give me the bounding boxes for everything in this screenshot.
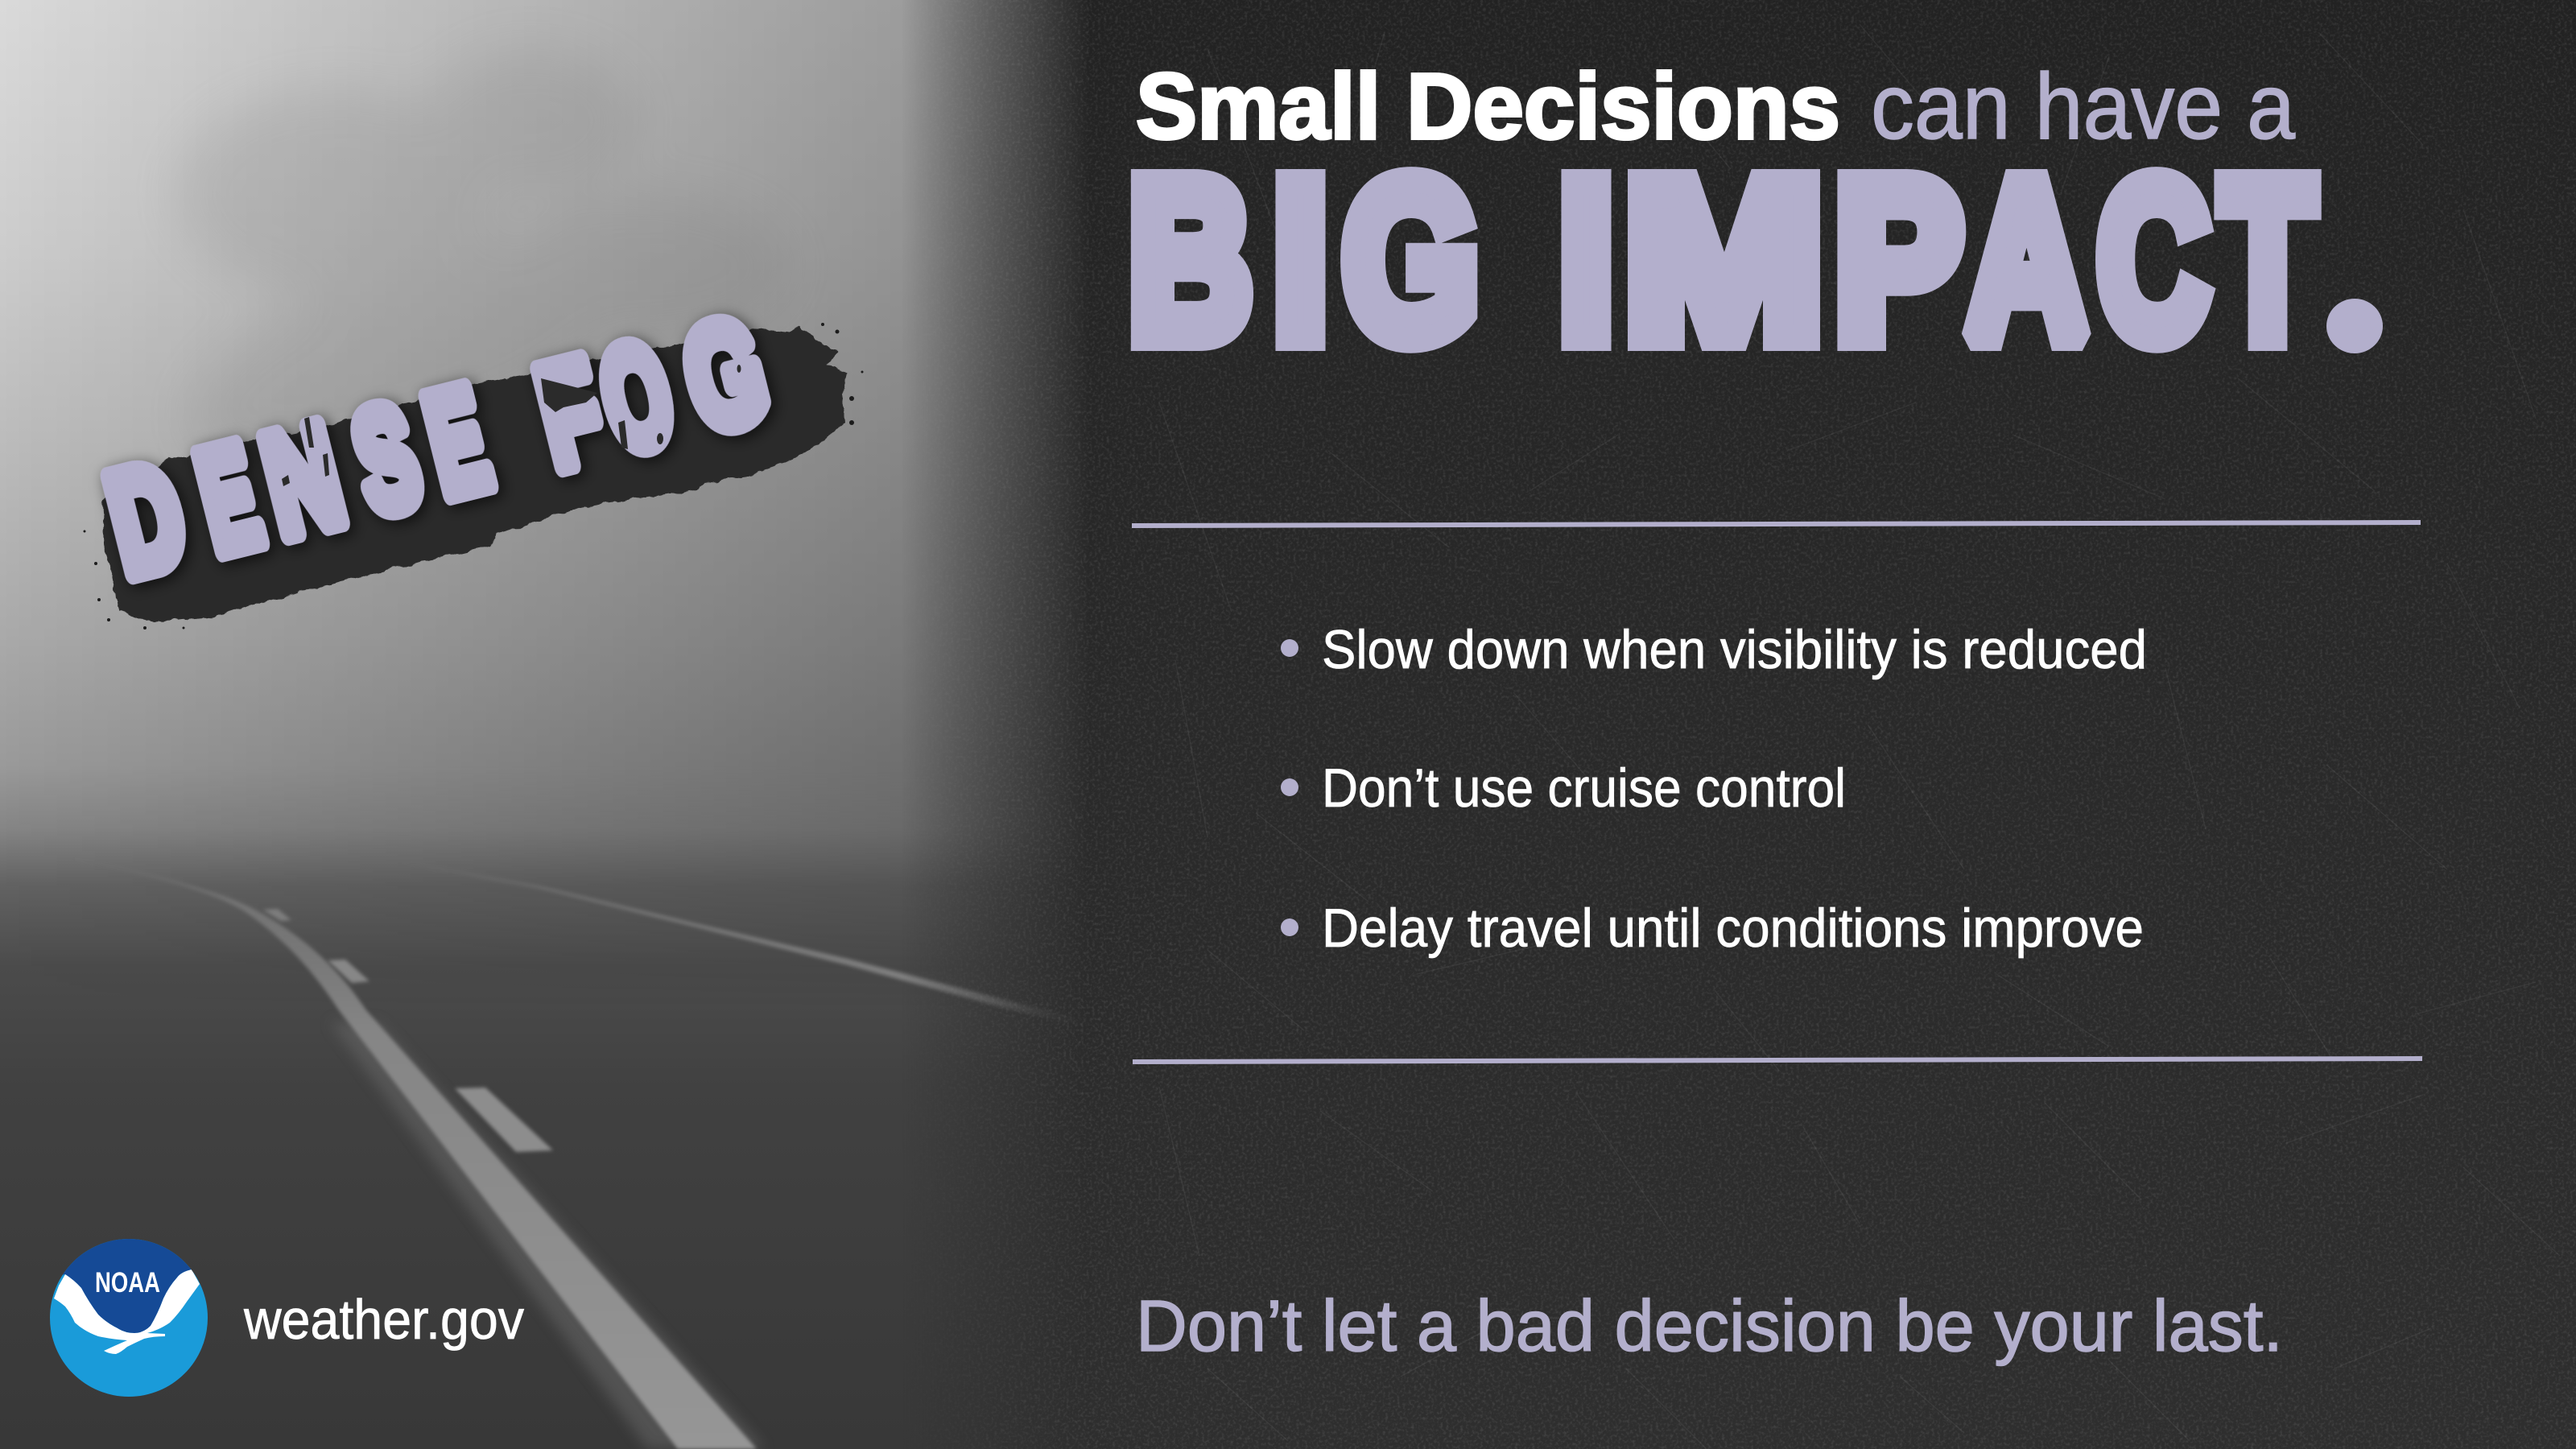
brush stroke xyxy=(101,326,846,622)
heading: small decisions: can have a xyxy=(1871,54,2295,159)
road: dashed centre lines xyxy=(263,909,553,1152)
heading: BIG IMPACT: I xyxy=(1274,133,1327,386)
divider bottom xyxy=(1133,1056,2422,1064)
title: DENSE FOG: G xyxy=(670,287,781,463)
title: DENSE FOG: S xyxy=(340,374,434,545)
distress marks xyxy=(282,365,741,486)
title: DENSE FOG: N xyxy=(250,394,357,568)
heading: BIG IMPACT: I xyxy=(1559,133,1613,386)
closing statement: Don’t let a bad decision be your last. xyxy=(1136,1286,2283,1367)
heading: BIG IMPACT: B xyxy=(1129,133,1252,386)
title: DENSE FOG xyxy=(94,287,781,606)
logo dark blue cap xyxy=(63,1239,192,1333)
road: shoulder line soft edge xyxy=(330,1022,765,1449)
road: far edge line xyxy=(517,882,1045,1015)
heading: BIG IMPACT: G xyxy=(1343,133,1478,386)
heading: small decisions: Small Decisions xyxy=(1136,54,1840,159)
title: DENSE FOG: E xyxy=(412,357,503,527)
logo: NOAA xyxy=(50,1239,208,1397)
bullet list xyxy=(1281,619,2147,959)
heading: BIG IMPACT: C xyxy=(2098,133,2209,386)
logo white bird xyxy=(54,1269,200,1354)
divider top xyxy=(1132,520,2421,528)
round period xyxy=(2326,299,2383,353)
dense fog badge xyxy=(84,287,863,630)
heading: BIG IMPACT: M xyxy=(1625,133,1823,386)
heading: BIG IMPACT: . xyxy=(2323,133,2386,386)
photo: foggy road xyxy=(0,0,1075,1449)
brush splatter xyxy=(84,323,863,630)
bullet: slow down: Slow down when visibility is reduced xyxy=(1322,619,2147,680)
title: DENSE FOG: O xyxy=(586,311,687,484)
road: shoulder line xyxy=(185,886,758,1449)
fog cloud shapes xyxy=(187,65,675,436)
heading: BIG IMPACT xyxy=(1129,133,2386,386)
heading: BIG IMPACT: T xyxy=(2221,133,2314,386)
heading: small decisions xyxy=(1136,54,2295,159)
title: DENSE FOG: E xyxy=(184,414,275,584)
bullet: delay travel: Delay travel until conditions improve xyxy=(1322,898,2144,959)
bullet: cruise control: Don’t use cruise control xyxy=(1322,758,1846,819)
heading: BIG IMPACT: A xyxy=(1967,133,2087,386)
logo wordmark: NOAA xyxy=(95,1267,160,1298)
website: weather.gov: weather.gov xyxy=(243,1288,524,1351)
title: DENSE FOG: D xyxy=(94,433,200,606)
title: DENSE FOG: F xyxy=(523,328,617,499)
heading: BIG IMPACT: P xyxy=(1835,133,1962,386)
